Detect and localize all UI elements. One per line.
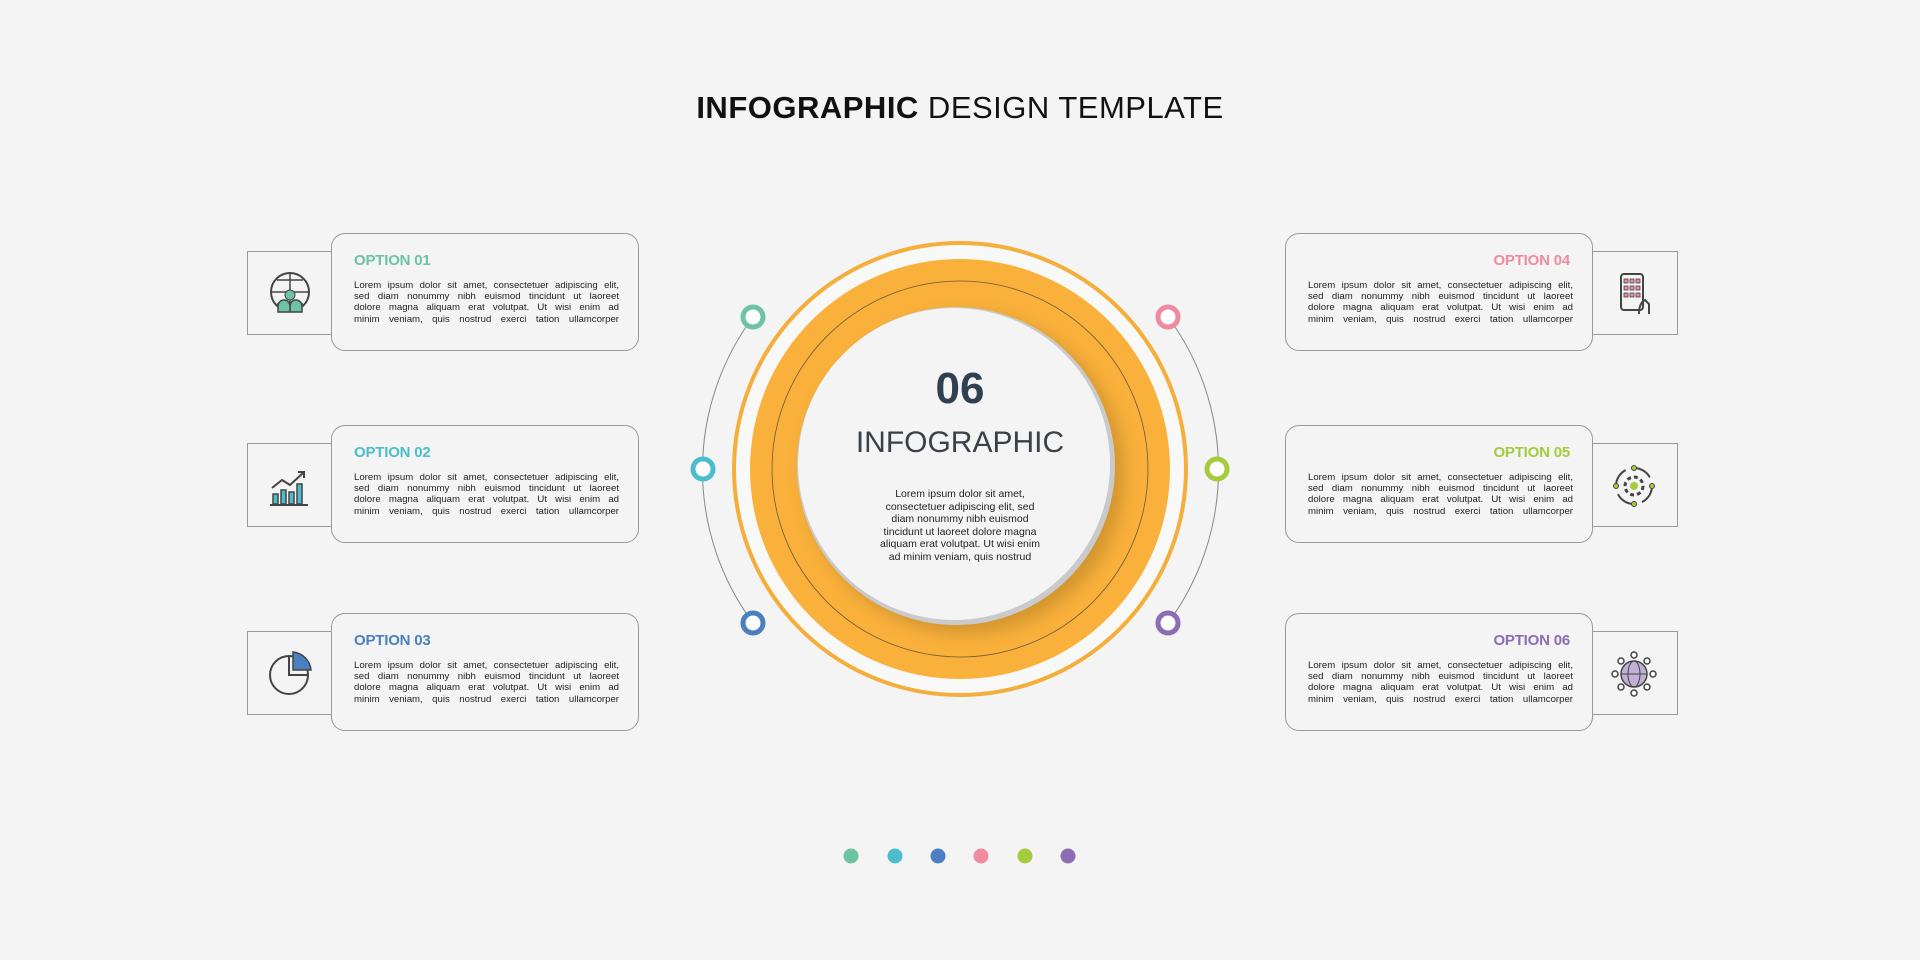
central ring graphic xyxy=(690,241,1230,697)
option text: sed diam nonummy nibh euismod tincidunt ut laoreet xyxy=(354,671,619,682)
option text: Lorem ipsum dolor sit amet, consectetuer adipiscing elit, xyxy=(354,280,619,291)
panel: option 06 xyxy=(1285,613,1678,731)
center text: ad minim veniam, quis nostrud xyxy=(889,551,1031,563)
icon: globe people xyxy=(247,251,332,335)
option text xyxy=(354,472,619,517)
option title: OPTION 04 xyxy=(1493,252,1570,269)
option text: minim veniam, quis nostrud exerci tation ullamcorper xyxy=(354,506,619,517)
option text: dolore magna aliquam erat volutpat. Ut wisi enim ad xyxy=(354,302,619,313)
option text: dolore magna aliquam erat volutpat. Ut wisi enim ad xyxy=(1308,682,1573,693)
panel: option 05 xyxy=(1285,425,1678,543)
option text: Lorem ipsum dolor sit amet, consectetuer adipiscing elit, xyxy=(1308,472,1573,483)
option text: Lorem ipsum dolor sit amet, consectetuer adipiscing elit, xyxy=(1308,660,1573,671)
center number: 06 xyxy=(936,364,984,413)
center text: aliquam erat volutpat. Ut wisi enim xyxy=(880,538,1040,550)
option text: sed diam nonummy nibh euismod tincidunt ut laoreet xyxy=(1308,483,1573,494)
connector arcs xyxy=(702,317,1219,623)
title: INFOGRAPHIC DESIGN TEMPLATE xyxy=(696,90,1224,125)
outer ring xyxy=(734,243,1186,695)
option title: OPTION 06 xyxy=(1493,632,1570,649)
option text: minim veniam, quis nostrud exerci tation ullamcorper xyxy=(1308,694,1573,705)
option text: sed diam nonummy nibh euismod tincidunt ut laoreet xyxy=(1308,671,1573,682)
option text xyxy=(1308,280,1573,325)
option title: OPTION 02 xyxy=(354,444,431,461)
option text: minim veniam, quis nostrud exerci tation ullamcorper xyxy=(1308,506,1573,517)
option title: OPTION 05 xyxy=(1493,444,1570,461)
center text xyxy=(880,488,1040,563)
panel: option 01 xyxy=(247,233,639,351)
option text: minim veniam, quis nostrud exerci tation ullamcorper xyxy=(354,694,619,705)
option text: minim veniam, quis nostrud exerci tation ullamcorper xyxy=(1308,314,1573,325)
icon: phone keypad xyxy=(1593,251,1678,335)
center text: Lorem ipsum dolor sit amet, xyxy=(895,488,1025,500)
inner white circle xyxy=(798,308,1110,620)
icon: gear cycle xyxy=(1593,443,1678,527)
panel: option 02 xyxy=(247,425,639,543)
panel: option 03 xyxy=(247,613,639,731)
option text xyxy=(1308,660,1573,705)
option dots xyxy=(693,307,1227,633)
panel: option 04 xyxy=(1285,233,1678,351)
option text: dolore magna aliquam erat volutpat. Ut wisi enim ad xyxy=(1308,494,1573,505)
option text: Lorem ipsum dolor sit amet, consectetuer adipiscing elit, xyxy=(1308,280,1573,291)
center text: tincidunt ut laoreet dolore magna xyxy=(884,526,1036,538)
option text xyxy=(354,660,619,705)
option text: minim veniam, quis nostrud exerci tation ullamcorper xyxy=(354,314,619,325)
option text: dolore magna aliquam erat volutpat. Ut wisi enim ad xyxy=(354,494,619,505)
option title: OPTION 03 xyxy=(354,632,431,649)
option text xyxy=(1308,472,1573,517)
option text: sed diam nonummy nibh euismod tincidunt ut laoreet xyxy=(1308,291,1573,302)
icon: network globe xyxy=(1593,631,1678,715)
legend dots xyxy=(844,848,1076,864)
icon: bar chart xyxy=(247,443,332,527)
thick orange band xyxy=(750,259,1170,679)
option text: Lorem ipsum dolor sit amet, consectetuer adipiscing elit, xyxy=(354,472,619,483)
center text: consectetuer adipiscing elit, sed xyxy=(886,501,1034,513)
option text xyxy=(354,280,619,325)
icon: pie chart xyxy=(247,631,332,715)
option title: OPTION 01 xyxy=(354,252,431,269)
option text: sed diam nonummy nibh euismod tincidunt ut laoreet xyxy=(354,291,619,302)
center heading: INFOGRAPHIC xyxy=(856,426,1064,459)
option text: sed diam nonummy nibh euismod tincidunt ut laoreet xyxy=(354,483,619,494)
option text: Lorem ipsum dolor sit amet, consectetuer adipiscing elit, xyxy=(354,660,619,671)
center text: diam nonummy nibh euismod xyxy=(891,513,1029,525)
option text: dolore magna aliquam erat volutpat. Ut wisi enim ad xyxy=(1308,302,1573,313)
option text: dolore magna aliquam erat volutpat. Ut wisi enim ad xyxy=(354,682,619,693)
